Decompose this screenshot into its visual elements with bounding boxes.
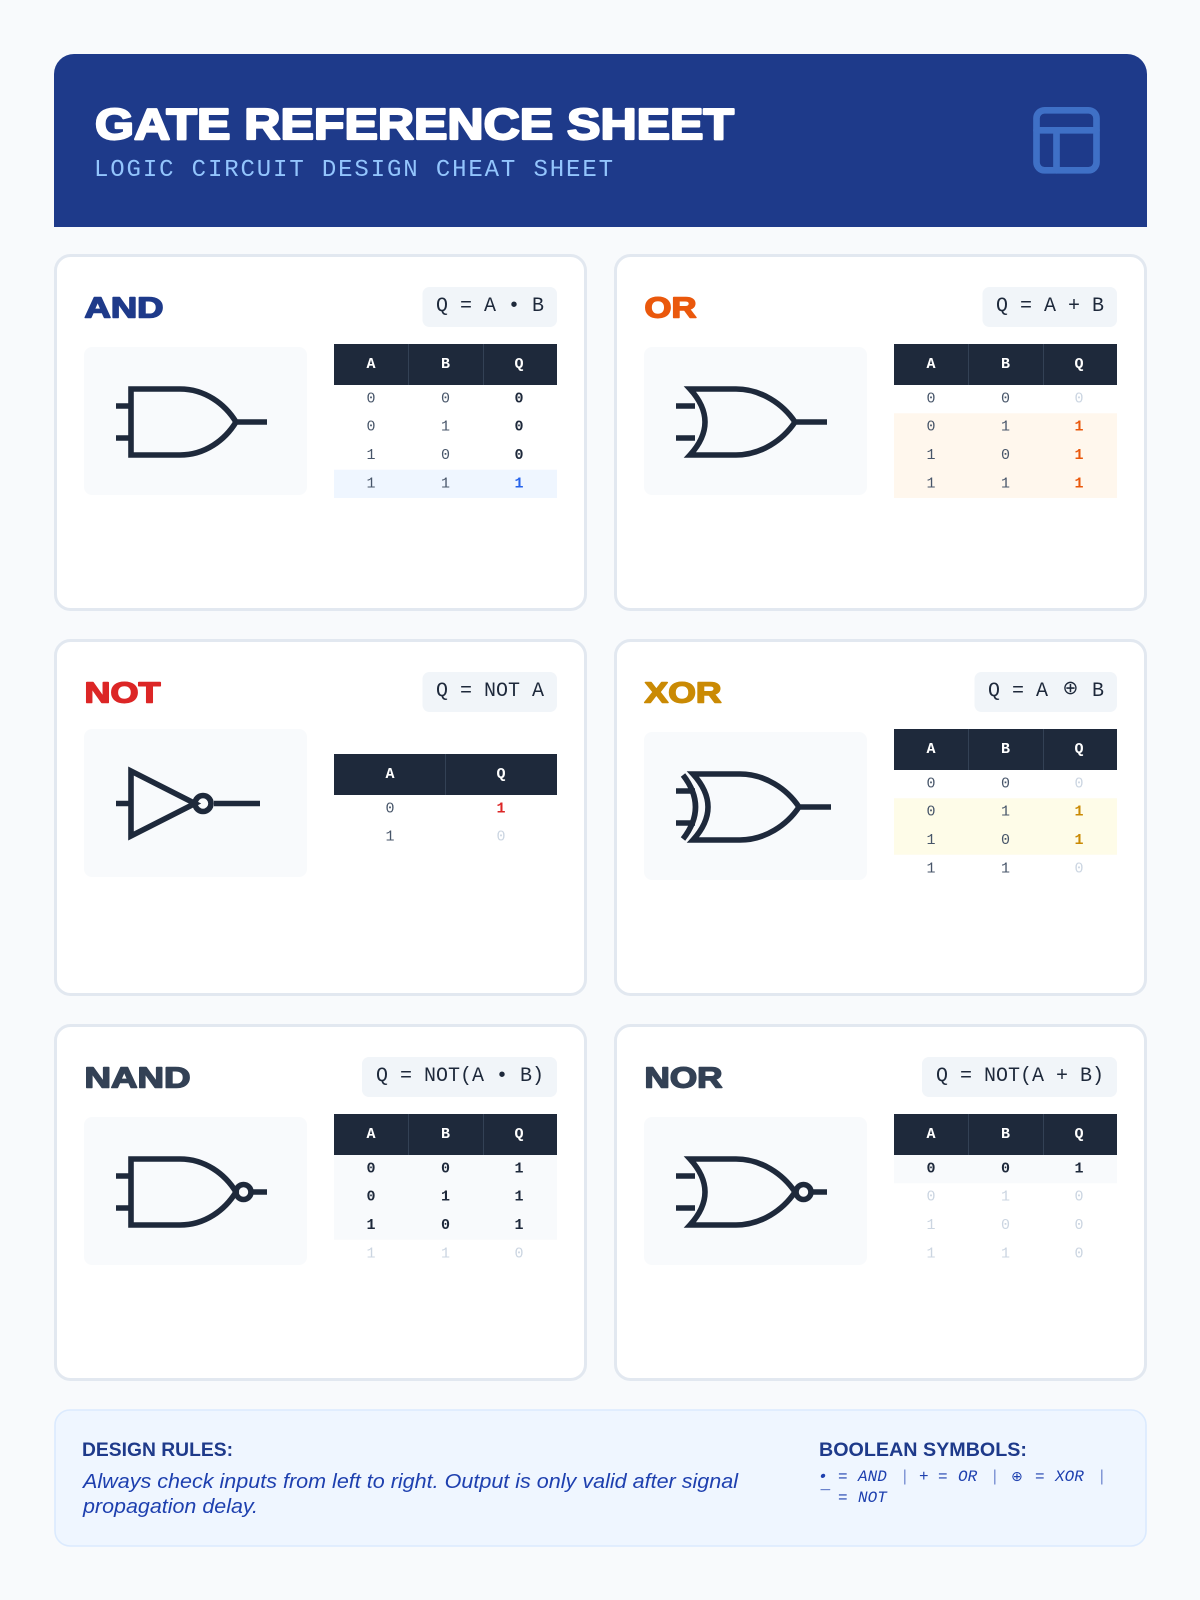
diagram: XOR gate symbol <box>644 732 867 880</box>
boolean symbols: ⊕ <box>1011 1469 1023 1485</box>
truth table: OR: Q <box>1074 356 1084 373</box>
heading: OR: OR <box>644 292 697 324</box>
diagram: NOR gate symbol <box>644 1117 867 1265</box>
design rules: Always check inputs from left to right. Output is only valid after signal <box>82 1471 739 1493</box>
boolean symbols: AND <box>857 1468 887 1486</box>
formula: NOR: Q = NOT(A + B) <box>936 1065 1104 1088</box>
truth table: OR: 1 <box>1001 476 1010 492</box>
truth table: AND: 1 <box>441 418 450 436</box>
truth table: NAND: 1 <box>366 1217 376 1234</box>
truth table: OR: 1 <box>926 476 936 492</box>
diagram: OR gate symbol <box>644 347 867 495</box>
truth table: NAND: 1 <box>514 1188 524 1206</box>
truth table: XOR: Q <box>1074 741 1084 758</box>
formula: AND: Q = A • B <box>436 295 544 318</box>
design rules: DESIGN RULES: <box>82 1440 233 1461</box>
truth table: NAND: 0 <box>366 1160 376 1178</box>
truth table: XOR: A <box>926 741 936 758</box>
truth table: OR: B <box>1001 356 1010 373</box>
design rules <box>82 1440 739 1518</box>
truth table: AND: B <box>441 356 450 373</box>
truth table: XOR: 0 <box>1074 860 1084 878</box>
truth table: OR: 1 <box>1074 447 1084 464</box>
truth table: NAND: Q <box>514 1126 524 1143</box>
truth table: XOR: B <box>1001 741 1010 758</box>
truth table: OR <box>894 344 1117 498</box>
truth table: NOR: A <box>926 1126 936 1143</box>
boolean symbols: = <box>1035 1468 1045 1486</box>
formula: AND <box>422 287 557 327</box>
header banner <box>54 54 1147 227</box>
truth table: XOR: 0 <box>1074 776 1084 792</box>
boolean symbols: | <box>990 1468 1000 1486</box>
truth table: XOR: 1 <box>926 832 936 849</box>
truth table: XOR: 0 <box>926 776 936 792</box>
truth table: NOR: 1 <box>926 1246 936 1262</box>
heading: NOR: NOR <box>644 1062 723 1094</box>
truth table: OR: A <box>926 356 936 373</box>
truth table: AND: 0 <box>514 418 524 436</box>
truth table: XOR <box>894 729 1117 878</box>
truth table: XOR: 0 <box>926 804 936 820</box>
title: GATE REFERENCE SHEET <box>95 100 734 149</box>
truth table: XOR: 1 <box>1001 804 1010 820</box>
formula: XOR <box>974 672 1117 712</box>
truth table: NAND: A <box>366 1126 376 1143</box>
truth table: NOR: 0 <box>1074 1217 1084 1234</box>
truth table: NOT <box>334 754 557 846</box>
truth table: NOR: 0 <box>1074 1188 1084 1206</box>
truth table: OR: 1 <box>926 447 936 464</box>
truth table: NOR: 0 <box>926 1160 936 1178</box>
truth table: XOR: 1 <box>1074 832 1084 849</box>
truth table: NOR: B <box>1001 1126 1010 1143</box>
truth table: NOR: 0 <box>1001 1160 1010 1178</box>
truth table: AND: 0 <box>514 447 524 464</box>
truth table: NAND <box>334 1114 557 1262</box>
formula: XOR: ⊕ <box>1063 677 1078 699</box>
truth table: NAND: 1 <box>366 1246 376 1262</box>
boolean symbols: | <box>1097 1468 1107 1486</box>
subtitle: LOGIC CIRCUIT DESIGN CHEAT SHEET <box>94 157 613 184</box>
boolean symbols <box>818 1440 1107 1507</box>
truth table: NOR: Q <box>1074 1126 1084 1143</box>
truth table: AND: A <box>366 356 376 373</box>
truth table: NOT: Q <box>496 766 506 783</box>
truth table: NAND: 1 <box>441 1188 450 1206</box>
truth table: XOR: 1 <box>1001 860 1010 878</box>
truth table: OR: 1 <box>1074 418 1084 436</box>
truth table: NAND: 0 <box>514 1246 524 1262</box>
boolean symbols: + <box>919 1468 929 1486</box>
boolean symbols: = <box>938 1468 948 1486</box>
heading: NAND: NAND <box>84 1062 190 1094</box>
formula: NAND: Q = NOT(A • B) <box>376 1065 544 1088</box>
boolean symbols: ¯ <box>819 1489 831 1507</box>
truth table: XOR: 0 <box>1001 832 1010 849</box>
boolean symbols: BOOLEAN SYMBOLS: <box>819 1440 1027 1461</box>
boolean symbols: OR <box>958 1468 978 1486</box>
diagram: NAND gate symbol <box>84 1117 307 1265</box>
truth table: AND: 0 <box>441 447 450 464</box>
formula: OR: Q = A + B <box>996 295 1104 318</box>
panel: NAND gate <box>56 1026 586 1380</box>
panel: NOT gate <box>56 640 586 994</box>
truth table: NOR: 0 <box>1074 1246 1084 1262</box>
truth table: AND: 1 <box>366 476 376 492</box>
truth table: NOT: 1 <box>496 800 506 818</box>
boolean symbols: NOT <box>858 1489 888 1507</box>
heading: AND: AND <box>84 292 164 324</box>
truth table: NOT: 1 <box>385 828 395 846</box>
truth table: NOT: A <box>385 766 395 783</box>
icon: layout <box>1036 110 1096 170</box>
truth table: NOR: 1 <box>1001 1188 1010 1206</box>
truth table: NOR: 1 <box>926 1217 936 1234</box>
truth table: OR: 0 <box>1001 390 1010 408</box>
truth table: NOR <box>894 1114 1117 1262</box>
truth table: AND: 0 <box>441 390 450 408</box>
truth table: NOT: 0 <box>496 828 506 846</box>
panel: XOR gate <box>616 640 1146 994</box>
footer panel <box>55 1410 1146 1546</box>
truth table: NOR: 1 <box>1001 1246 1010 1262</box>
boolean symbols: = <box>838 1468 848 1486</box>
formula: OR <box>982 287 1117 327</box>
truth table: AND: 0 <box>514 390 524 408</box>
truth table: AND: Q <box>514 356 524 373</box>
panel: OR gate <box>616 256 1146 610</box>
diagram: AND gate symbol <box>84 347 307 495</box>
truth table: AND: 1 <box>441 476 450 492</box>
truth table: AND: 1 <box>366 447 376 464</box>
truth table: XOR: 0 <box>1001 776 1010 792</box>
panel: AND gate <box>56 256 586 610</box>
diagram: NOT gate symbol <box>84 729 307 877</box>
truth table: OR: 0 <box>926 418 936 436</box>
formula: NOR <box>922 1057 1117 1097</box>
truth table: NAND: 0 <box>366 1188 376 1206</box>
truth table: NAND: 0 <box>441 1217 450 1234</box>
truth table: AND: 1 <box>514 476 524 492</box>
truth table: OR: 0 <box>1074 390 1084 408</box>
formula: NOT <box>422 672 557 712</box>
truth table: NOR: 1 <box>1074 1160 1084 1178</box>
formula: NAND <box>362 1057 557 1097</box>
truth table: XOR: 1 <box>1074 804 1084 820</box>
truth table: NAND: 1 <box>514 1217 524 1234</box>
formula: NOT: Q = NOT A <box>436 680 544 703</box>
boolean symbols: XOR <box>1054 1468 1084 1486</box>
truth table: AND <box>334 344 557 498</box>
boolean symbols: • <box>818 1468 828 1486</box>
truth table: XOR: 1 <box>926 860 936 878</box>
truth table: NOR: 0 <box>926 1188 936 1206</box>
truth table: NOT: 0 <box>385 800 395 818</box>
design rules: propagation delay. <box>82 1496 258 1518</box>
truth table: NAND: 1 <box>441 1246 450 1262</box>
truth table: OR: 1 <box>1001 418 1010 436</box>
truth table: NAND: 1 <box>514 1160 524 1178</box>
truth table: AND: 0 <box>366 390 376 408</box>
truth table: OR: 1 <box>1074 476 1084 492</box>
truth table: OR: 0 <box>1001 447 1010 464</box>
heading: XOR: XOR <box>644 677 722 709</box>
heading: NOT: NOT <box>84 677 161 709</box>
boolean symbols: | <box>900 1468 910 1486</box>
formula: XOR: B <box>1092 680 1104 703</box>
truth table: AND: 0 <box>366 418 376 436</box>
truth table: NOR: 0 <box>1001 1217 1010 1234</box>
boolean symbols: = <box>838 1489 848 1507</box>
formula: XOR: Q = A <box>988 680 1048 703</box>
truth table: OR: 0 <box>926 390 936 408</box>
truth table: NAND: B <box>441 1126 450 1143</box>
truth table: NAND: 0 <box>441 1160 450 1178</box>
panel: NOR gate <box>616 1026 1146 1380</box>
